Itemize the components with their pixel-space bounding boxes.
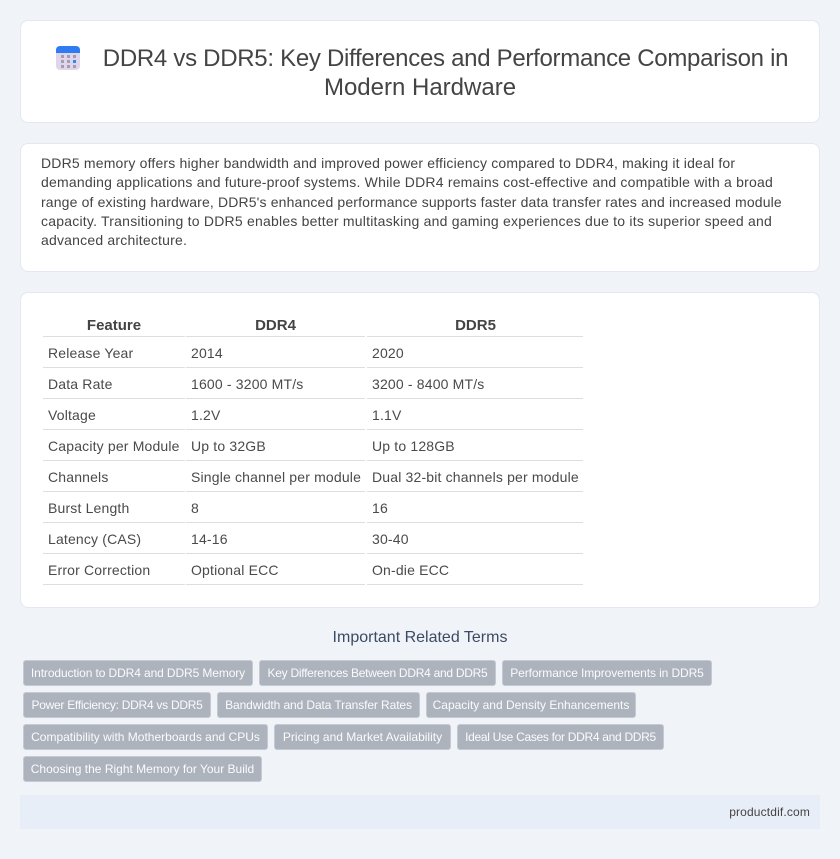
comparison table: Up to 32GB	[191, 438, 266, 454]
comparison table: Data Rate	[48, 376, 113, 392]
comparison table: DDR4	[255, 317, 296, 334]
comparison table: 1600 - 3200 MT/s	[191, 376, 303, 392]
comparison table: 3200 - 8400 MT/s	[372, 376, 484, 392]
heading: related terms: Important Related Terms	[333, 629, 507, 646]
footer: productdif.com	[729, 805, 810, 819]
tag list: related terms: Bandwidth and Data Transfer Rates	[225, 698, 412, 712]
text block: summary: capacity. Transitioning to DDR5 enables better multitasking and gaming experiences due to its superior speed and	[41, 213, 772, 229]
comparison table: 2014	[191, 345, 223, 361]
title	[103, 45, 788, 101]
text block: summary	[41, 155, 782, 248]
comparison table: Burst Length	[48, 500, 129, 516]
comparison table: 14-16	[191, 531, 228, 547]
panel: title card	[20, 20, 820, 123]
comparison table: Voltage	[48, 407, 96, 423]
title: Modern Hardware	[324, 74, 516, 101]
icon: calendar	[56, 46, 80, 70]
comparison table: Feature	[87, 317, 141, 334]
comparison table	[43, 317, 583, 585]
comparison table: 16	[372, 500, 388, 516]
comparison table: Optional ECC	[191, 562, 279, 578]
tag list: related terms: Key Differences Between DDR4 and DDR5	[268, 666, 487, 680]
text block: summary: range of existing hardware, DDR5's enhanced performance supports faster data transfer rates and increased module	[41, 194, 782, 210]
comparison table: DDR5	[455, 317, 496, 334]
tag list: related terms: Introduction to DDR4 and DDR5 Memory	[31, 666, 245, 680]
comparison table: 2020	[372, 345, 404, 361]
comparison table: 8	[191, 500, 199, 516]
tag list: related terms: Choosing the Right Memory for Your Build	[31, 762, 254, 776]
comparison table: 1.2V	[191, 407, 220, 423]
text block: summary: DDR5 memory offers higher bandwidth and improved power efficiency compared to DDR4, making it ideal for	[41, 155, 735, 171]
tag list: related terms: Power Efficiency: DDR4 vs DDR5	[31, 698, 203, 712]
comparison table: Channels	[48, 469, 109, 485]
comparison table: Dual 32-bit channels per module	[372, 469, 579, 485]
text block: summary: advanced architecture.	[41, 232, 187, 248]
tag list: related terms: Pricing and Market Availability	[283, 730, 442, 744]
comparison table: Capacity per Module	[48, 438, 180, 454]
text block: summary: demanding applications and future-proof systems. While DDR4 remains cost-effective and compatible with a broad	[41, 174, 773, 190]
footer	[20, 795, 820, 829]
comparison table: 1.1V	[372, 407, 401, 423]
tag list: related terms: Ideal Use Cases for DDR4 and DDR5	[465, 730, 656, 744]
comparison table: Error Correction	[48, 562, 150, 578]
panel: comparison table card	[20, 292, 820, 608]
title: DDR4 vs DDR5: Key Differences and Performance Comparison in	[103, 45, 788, 72]
comparison table: 30-40	[372, 531, 409, 547]
panel: summary card	[20, 143, 820, 272]
comparison table: Release Year	[48, 345, 133, 361]
tag list: related terms: Compatibility with Motherboards and CPUs	[31, 730, 260, 744]
comparison table: Up to 128GB	[372, 438, 455, 454]
comparison table: On-die ECC	[372, 562, 449, 578]
tag list: related terms: Capacity and Density Enhancements	[433, 698, 629, 712]
tag list: related terms: Performance Improvements in DDR5	[510, 666, 704, 680]
comparison table: Latency (CAS)	[48, 531, 141, 547]
tag list: related terms	[23, 660, 712, 782]
comparison table: Single channel per module	[191, 469, 361, 485]
